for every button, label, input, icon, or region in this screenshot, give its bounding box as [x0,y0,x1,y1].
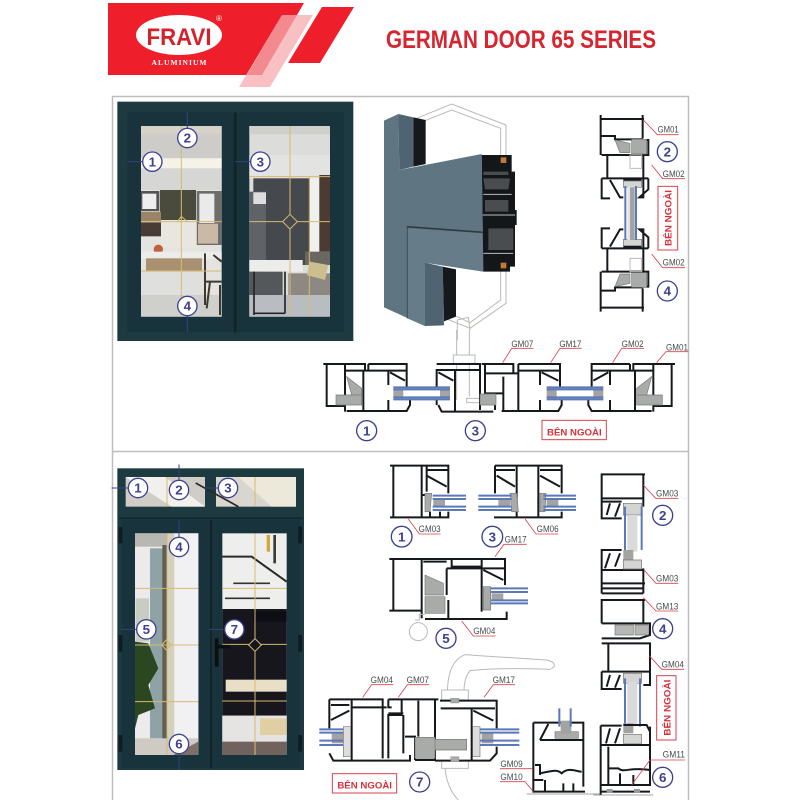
slate profile body [384,114,483,326]
marker 4 [178,296,197,316]
section 5: GM04 [473,626,495,636]
marker 6: 6 [175,737,183,752]
section: horizontal 1 and 3: GM07 [511,339,533,349]
hinges [119,527,302,752]
marker 1: 1 [398,529,406,544]
marker lines [127,112,252,332]
outside label: BÊN NGOÀI [663,190,674,246]
door handle outline [442,655,554,800]
marker lines [112,464,226,770]
section: vertical 2 and 4: GM01 [658,125,679,135]
gaskets [501,157,506,163]
sill section [533,723,585,792]
centre right unit [502,364,562,411]
marker 1: 1 [363,423,371,438]
marker 1 [128,478,148,498]
marker 1: 1 [149,154,157,169]
section: vertical 2 and 4: GM02 [663,169,685,179]
marker 5: 5 [442,631,450,646]
marker 3 [482,526,503,547]
panel: window photo [117,102,353,341]
red slanted stripe [288,7,354,63]
marker 3: 3 [257,154,264,169]
marker 6 [653,767,673,787]
marker 1: 1 [134,481,142,496]
marker 3: 3 [489,529,496,544]
sill [601,725,650,795]
outside label [542,420,606,440]
section 5 [389,535,528,641]
sections: 1, 3 and 5 [389,466,576,648]
glass right [547,389,557,397]
marker 1 [143,152,162,171]
marker 3: 3 [472,423,479,438]
leaders [632,485,685,785]
section: horizontal 1 and 3: GM02 [622,339,644,349]
marker 7: 7 [231,622,238,637]
section: vertical 2, 4 and 6: GM11 [663,750,685,760]
marker 3 [465,421,485,441]
section 3: GM06 [537,524,559,534]
pink slanted stripe [239,15,313,87]
section 1 [390,466,466,534]
section 5: GM17 [505,535,527,545]
glass [627,187,635,240]
left glass interior [141,126,222,317]
handle stub [457,317,470,340]
handle [453,330,480,403]
marker 1 [391,526,412,547]
section: horizontal 7 and sill: GM07 [407,675,429,685]
leaders [643,120,685,268]
section: vertical 2, 4 and 6: GM03 [656,489,678,499]
glass left [393,389,403,397]
right glass interior [249,126,330,317]
upper frame [601,474,645,518]
section: horizontal 7 and sill: GM17 [493,675,515,685]
upper glass [627,515,637,552]
section: vertical 2 and 4: GM02 [663,258,685,268]
outside label [657,676,676,740]
marker 3 [251,152,270,171]
section: vertical 2, 4 and 6: GM13 [656,601,678,611]
left door glass [135,533,198,755]
outside label [332,774,397,793]
leaders [503,348,688,363]
logo subtitle: ALUMINIUM [152,58,206,67]
marker 3 [218,478,238,498]
right unit [588,364,675,412]
marker 2: 2 [184,131,191,146]
marker 4: 4 [664,284,672,299]
transom glass [126,477,296,507]
panel: door photo [112,464,304,770]
title: GERMAN DOOR 65 SERIES [386,26,656,54]
section: horizontal 1 and 3: GM01 [666,342,688,352]
marker 1 [357,421,377,441]
logo word: FRAVI [146,24,212,51]
logo oval [136,15,222,55]
glass outline [417,104,506,328]
lower glass [627,682,637,725]
section: vertical 2, 4 and 6 [593,474,685,795]
section: vertical 2 and 4 [600,115,685,312]
section: horizontal 7 and sill: GM09 [500,759,523,769]
section 1: GM03 [419,524,441,534]
marker 5 [137,620,156,639]
marker 4: 4 [175,540,183,555]
header logo banner [108,3,354,87]
glass right [482,733,493,743]
marker 2 [653,505,673,525]
middle unit [437,364,518,412]
marker 7: 7 [416,775,423,790]
marker 2: 2 [175,483,183,498]
marker 7 [225,620,244,639]
window frame [117,102,353,341]
section: horizontal 7 and sill: GM10 [500,772,523,782]
section body [329,699,497,761]
section: horizontal 7 and sill [319,655,600,800]
outside label [658,186,678,250]
marker 2 [657,142,677,162]
marker 2: 2 [664,144,671,159]
marker 3: 3 [224,481,232,496]
section: vertical 2, 4 and 6: GM03 [656,574,678,584]
door frame [117,468,304,770]
marker 4: 4 [184,299,192,314]
red banner [108,3,304,75]
glass left [332,733,343,743]
page frame [112,96,688,800]
left unit [323,364,410,412]
marker 6 [169,734,189,754]
cut section [482,155,517,272]
section: horizontal 1 and 3 [323,330,688,441]
right door glass [222,533,287,755]
3D corner profile [384,104,517,340]
pink overlap [247,15,297,75]
registered mark: ® [216,14,222,23]
outside label: BÊN NGOÀI [547,426,602,437]
marker 5 [436,628,456,648]
section 3 [478,466,576,534]
section: horizontal 7 and sill: GM04 [371,675,393,685]
outside label: BÊN NGOÀI [662,680,673,736]
section: horizontal 1 and 3: GM17 [559,339,581,349]
door handle [217,638,230,667]
marker 2 [169,480,189,500]
marker 7 [410,772,430,792]
section: vertical 2, 4 and 6: GM04 [662,660,684,670]
marker 2: 2 [659,508,666,523]
marker 4 [169,537,189,557]
GM04 [602,623,650,689]
marker 2 [178,128,197,148]
marker 4: 4 [659,621,667,636]
marker 4 [657,281,677,301]
leaders [363,685,533,792]
lower of sash [601,549,645,623]
marker 4 [653,619,673,639]
outside label: BÊN NGOÀI [337,780,392,791]
marker 6: 6 [659,770,666,785]
marker 5: 5 [143,622,151,637]
